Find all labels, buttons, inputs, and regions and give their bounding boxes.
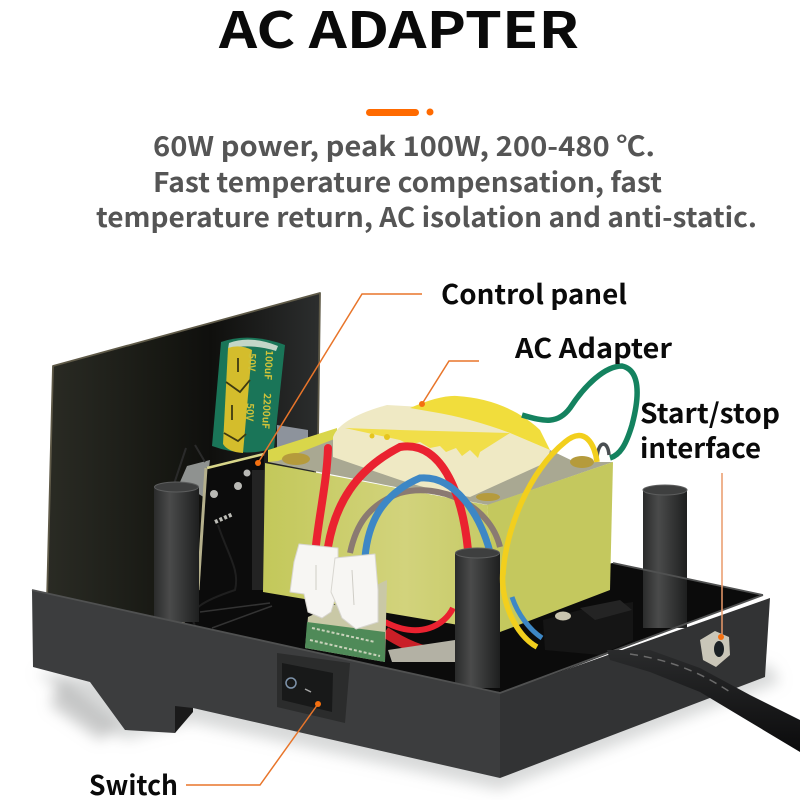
description text block: 60W power, peak 100W, 200-480 ℃. [153,125,655,164]
callout: AC adapter [419,327,672,407]
callout: start/stop interface: Start/stop [640,392,780,431]
capacitor: 50V [243,403,259,422]
wire: green [522,366,637,458]
capacitor [212,338,285,453]
product illustration: soldering station base with transformer [32,293,800,790]
power cable [607,650,800,752]
callout: switch [89,701,321,800]
callout: start/stop interface: interface [640,427,761,466]
capacitor: 2200uF [259,393,276,430]
base rim highlights [32,563,763,693]
yellow comb on bobbin face [345,428,510,458]
callout: control panel [255,273,627,466]
transformer [263,396,613,632]
power switch [277,653,350,723]
callout: start/stop interface [640,392,780,640]
accent divider: orange bar and dot [366,108,434,116]
yellow tape on bobbin top [410,396,550,450]
description text block [96,125,757,235]
base: foot shadow side [170,700,200,733]
grey coil lead [597,444,609,458]
base: left front face [32,590,500,778]
transformer right face [487,462,613,632]
callout: control panel: Control panel [441,273,627,312]
middle post [455,548,500,688]
wire: yellow and blue to terminal [512,597,542,638]
base: right front face [500,598,770,778]
description text block: Fast temperature compensation, fast [153,161,662,200]
description text block: temperature return, AC isolation and anti-static. [96,196,757,235]
lower red wire bundle [385,608,453,630]
terminal block [543,600,633,655]
terminal screws [282,453,310,465]
control board [192,454,272,628]
inner floor of the base [180,563,763,693]
cream bobbin body [333,405,550,497]
rear bracket behind control board [180,460,210,498]
right post [643,485,687,628]
yellow strap on the left of the core [268,428,337,462]
callout: AC adapter: AC Adapter [514,327,672,366]
small green circuit board [305,580,387,662]
transformer left face [263,463,500,632]
core top plate [268,432,613,505]
left post [154,482,199,622]
white connectors [290,544,378,629]
wire: blue [365,478,490,557]
back panel [47,293,320,640]
wire: red [316,446,468,550]
wire: brown [350,490,500,553]
insulator plate under wires [388,640,455,662]
ground shadow [36,665,780,790]
base: foot side [175,706,193,733]
capacitor: 50V [245,353,261,372]
capacitor: 100uF [261,350,278,381]
start/stop socket nut [700,631,730,667]
